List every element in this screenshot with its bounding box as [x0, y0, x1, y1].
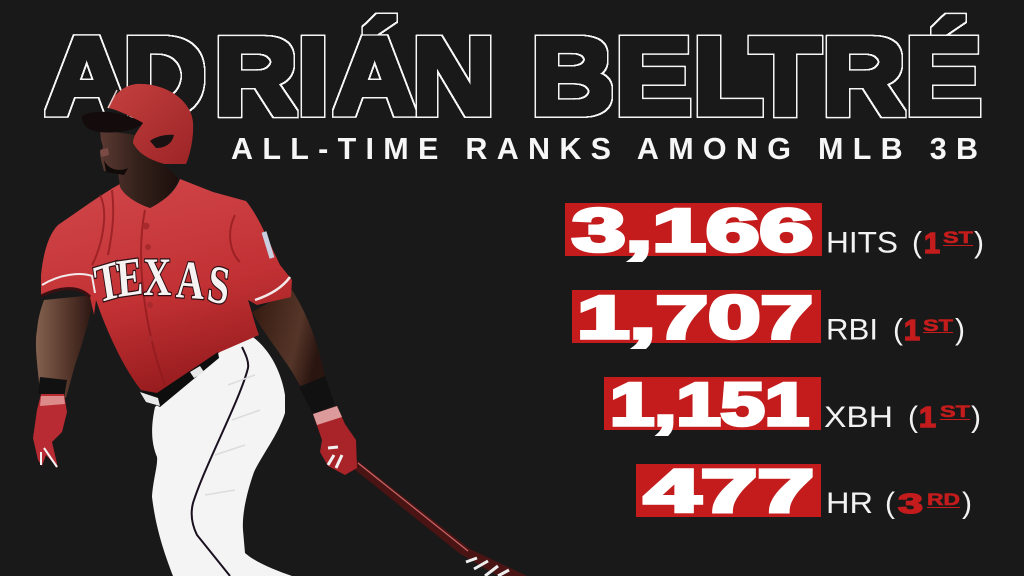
close bracket: ) — [962, 487, 972, 520]
stat number: 1,707 — [577, 284, 813, 351]
bat — [349, 458, 527, 576]
pants — [152, 335, 292, 576]
stat row: xbh — [604, 371, 981, 438]
stat label: XBH — [824, 401, 893, 434]
subtitle: ALL-TIME RANKS AMONG MLB 3B — [231, 132, 978, 166]
stat label: HITS — [826, 226, 898, 260]
stat row: hr — [636, 458, 972, 524]
rank number: 1 — [919, 402, 936, 434]
right wristband — [299, 376, 335, 414]
stat label: RBI — [826, 314, 878, 346]
stat bar — [572, 290, 821, 343]
left arm — [36, 295, 94, 398]
jersey — [41, 179, 292, 393]
rank suffix: ST — [940, 402, 971, 421]
close bracket: ) — [974, 226, 984, 260]
stat bar — [565, 203, 822, 256]
right glove — [313, 406, 357, 475]
rank suffix: ST — [923, 316, 954, 335]
title: outlined player name — [45, 15, 982, 137]
jersey buttons — [142, 222, 153, 342]
rank number: 1 — [924, 228, 940, 260]
left glove — [33, 394, 67, 468]
player photo illustration — [33, 84, 527, 576]
stat bar — [636, 464, 821, 517]
helmet — [82, 84, 193, 164]
stat row: rbi — [572, 284, 965, 351]
rank suffix: RD — [927, 490, 960, 509]
neck and face — [100, 126, 178, 208]
belt — [140, 352, 219, 407]
rank suffix: ST — [943, 228, 974, 247]
stat bar — [604, 377, 821, 430]
stat number: 1,151 — [610, 371, 809, 438]
left wristband — [38, 377, 67, 398]
stat number: 3,166 — [572, 197, 813, 264]
open bracket: ( — [908, 401, 918, 434]
rank number: 1 — [904, 315, 920, 347]
stat row: hits — [565, 197, 984, 264]
open bracket: ( — [885, 487, 895, 520]
stat number: 477 — [644, 458, 814, 524]
close bracket: ) — [971, 401, 981, 434]
rank number: 3 — [898, 488, 923, 519]
title: outlined player name: ADRIÁN — [45, 15, 495, 137]
open bracket: ( — [893, 314, 903, 346]
title: outlined player name: BELTRÉ — [531, 15, 982, 137]
jersey wordmark: TEXAS — [91, 246, 233, 318]
close bracket: ) — [955, 314, 965, 346]
right arm — [252, 290, 325, 386]
open bracket: ( — [912, 226, 922, 260]
stat label: HR — [826, 487, 873, 520]
